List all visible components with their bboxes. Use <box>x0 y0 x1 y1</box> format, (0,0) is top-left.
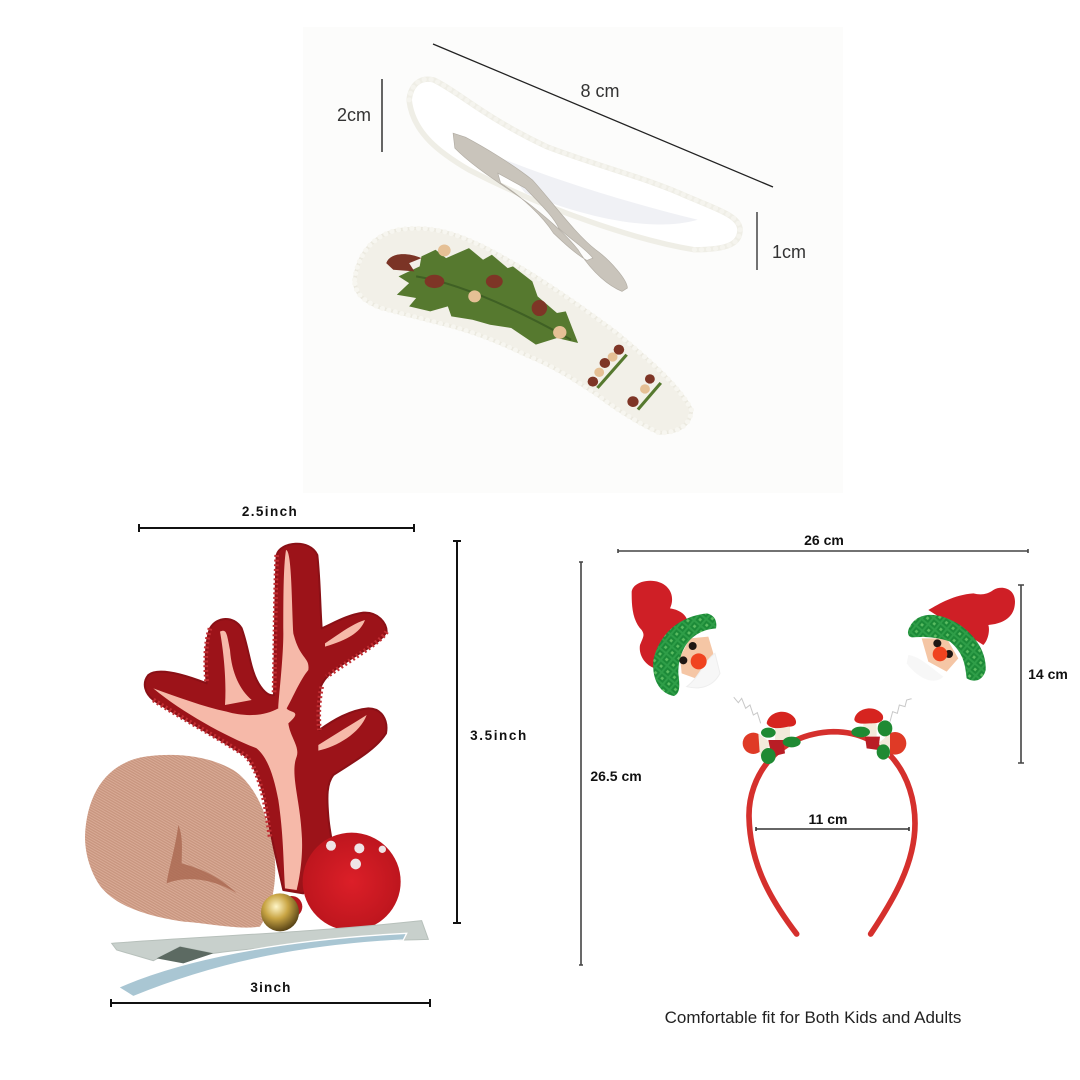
band <box>749 732 915 934</box>
dimension: 11 cm <box>756 811 909 831</box>
dimension: 1cm <box>757 212 806 270</box>
dimension: 3.5inch <box>453 541 528 923</box>
dimension: 8 cm: 8 cm <box>580 81 620 101</box>
antler <box>145 544 387 893</box>
dimension: 26.5 cm <box>579 562 642 965</box>
bell <box>281 896 302 917</box>
dimension: 3inch: 3inch <box>250 980 292 995</box>
dimension: 26.5 cm: 26.5 cm <box>590 768 642 784</box>
product: santa headband <box>632 581 1015 934</box>
left santa <box>632 581 745 708</box>
ornaments <box>386 254 421 271</box>
felt back clip <box>409 79 740 291</box>
clip base <box>112 921 428 961</box>
dimension: 3.5inch: 3.5inch <box>470 728 528 743</box>
dimension: 26 cm: 26 cm <box>804 532 844 548</box>
red ball <box>303 833 401 931</box>
tree embroidery <box>397 248 578 345</box>
embroidered front clip <box>355 228 691 433</box>
dimension: 14 cm: 14 cm <box>1028 666 1068 682</box>
caption: Comfortable fit for Both Kids and Adults <box>665 1008 961 1027</box>
dimension: 1cm: 1cm <box>772 242 806 262</box>
small gift stitches <box>597 355 661 410</box>
product: reindeer antler clip <box>85 544 428 997</box>
right santa <box>892 588 1015 706</box>
metal snap <box>453 133 627 291</box>
dimension: 2.5inch: 2.5inch <box>242 504 298 519</box>
panel: snap clips photo <box>303 27 843 493</box>
dimension: 8 cm <box>433 44 773 187</box>
ear <box>85 755 275 928</box>
dimension: 2cm: 2cm <box>337 105 371 125</box>
dimension: 2.5inch <box>139 504 414 532</box>
dimension: 2cm <box>337 79 382 152</box>
dimension: 14 cm <box>1018 585 1068 763</box>
dimension: 11 cm: 11 cm <box>809 811 847 827</box>
right mushrooms and holly <box>851 708 906 760</box>
dimension: 26 cm <box>618 532 1028 553</box>
left mushrooms and holly <box>743 712 801 764</box>
dimension: 3inch <box>111 980 430 1007</box>
springs <box>733 697 761 723</box>
antler highlights <box>153 550 367 890</box>
